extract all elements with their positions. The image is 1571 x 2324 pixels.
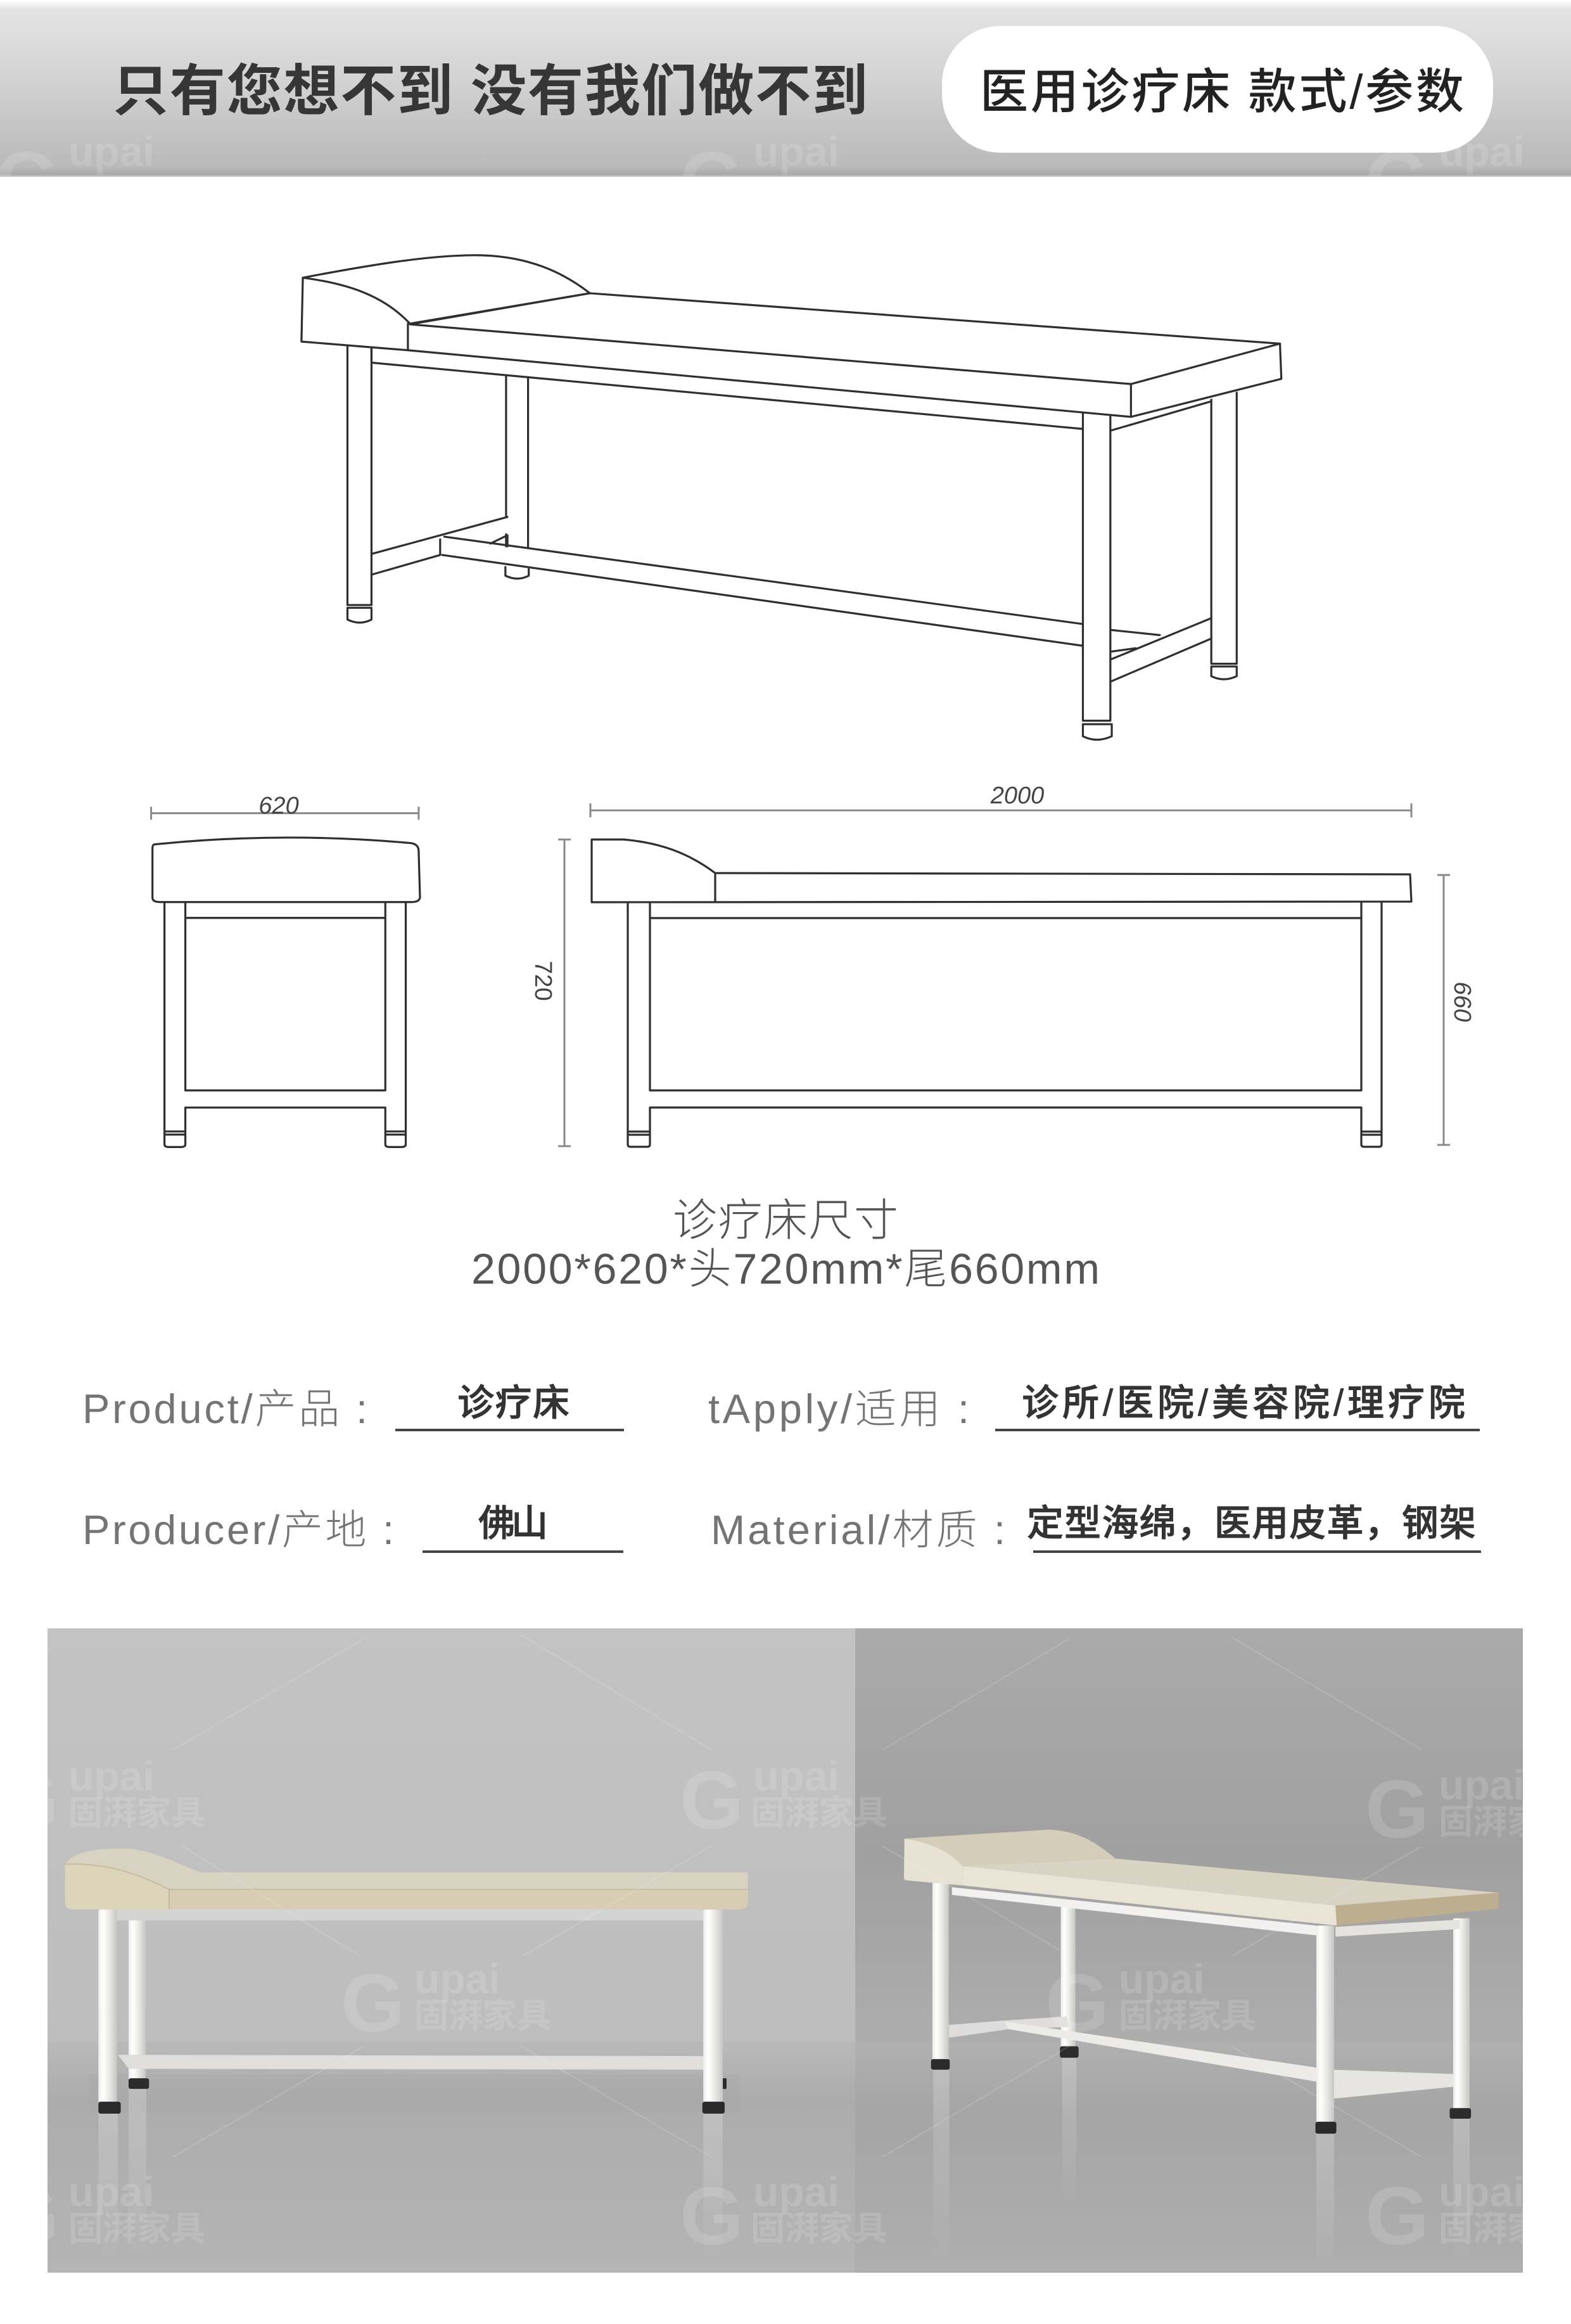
leg reflections bbox=[933, 2070, 950, 2262]
leg reflections bbox=[98, 2112, 118, 2262]
brand mark 3: 固湃家具 bbox=[414, 1997, 551, 2035]
label 660: 660 bbox=[1449, 981, 1475, 1022]
headrest bbox=[302, 255, 590, 350]
size caption: 2000*620*头720mm*尾660mm bbox=[471, 1245, 1100, 1293]
side legs and rails bbox=[628, 902, 1382, 1147]
side elevation drawing bbox=[558, 803, 1450, 1147]
brand mark 3 bbox=[345, 1963, 550, 2032]
spec: material: Material/材质 : bbox=[711, 1507, 1005, 1553]
label 2000: 2000 bbox=[990, 782, 1044, 809]
angled view bed bbox=[904, 1830, 1499, 2275]
back legs bbox=[1061, 1906, 1076, 2048]
brand mark 5 bbox=[1368, 1769, 1523, 1838]
mattress bbox=[65, 1849, 748, 1910]
brand mark 7: 固湃家具 bbox=[751, 2210, 887, 2248]
lower rail bbox=[118, 2055, 704, 2070]
brand mark 1: 固湃家具 bbox=[68, 1794, 205, 1832]
legs bbox=[348, 346, 371, 623]
header pill: 医用诊疗床 款式/参数 bbox=[980, 65, 1464, 119]
mattress and headrest bbox=[904, 1839, 964, 1886]
brand mark 6: 固湃家具 bbox=[68, 2210, 205, 2248]
brand mark 2: G bbox=[680, 1754, 744, 1846]
tail height dimension bbox=[1437, 875, 1450, 1145]
top rail bbox=[116, 1910, 704, 1920]
front legs bbox=[932, 1882, 949, 2060]
spec: producer: Producer/产地 : bbox=[82, 1507, 394, 1553]
spec: apply bbox=[708, 1382, 1480, 1432]
back leg bbox=[129, 1919, 146, 2079]
front cushion bbox=[153, 838, 420, 902]
header watermark: upai bbox=[68, 128, 155, 175]
front legs bbox=[98, 1910, 117, 2103]
spec: material bbox=[711, 1503, 1481, 1553]
brand mark 4: G bbox=[1045, 1957, 1109, 2049]
header watermark: G bbox=[1365, 134, 1429, 227]
size caption: 诊疗床尺寸 bbox=[673, 1196, 898, 1245]
brand mark 8 bbox=[1368, 2176, 1523, 2245]
spec: product bbox=[82, 1382, 624, 1432]
brand mark 4 bbox=[1049, 1963, 1254, 2032]
brand mark 3: G bbox=[341, 1957, 405, 2049]
label 620: 620 bbox=[258, 793, 299, 819]
perspective line drawing of bed bbox=[302, 255, 1282, 740]
head height dimension bbox=[558, 840, 571, 1146]
photo panel: angled view bbox=[855, 1628, 1523, 2275]
upper frame bbox=[952, 1887, 1316, 1936]
lower frame bbox=[949, 2017, 1069, 2038]
side profile mattress bbox=[592, 840, 1411, 902]
front elevation drawing bbox=[151, 807, 420, 1147]
frame rails bbox=[371, 349, 1211, 682]
brand mark 2: 固湃家具 bbox=[751, 1794, 887, 1832]
brand mark 2: upai bbox=[753, 1753, 839, 1799]
brand mark 6 bbox=[48, 2176, 204, 2244]
floor shadow bbox=[89, 2074, 739, 2112]
front view bed bbox=[65, 1849, 748, 2262]
photo watermarks bbox=[48, 1768, 1523, 2245]
mattress bbox=[408, 293, 1282, 417]
header pill bbox=[942, 26, 1493, 153]
brand mark 4: upai bbox=[1119, 1955, 1205, 2002]
brand mark 8: G bbox=[1365, 2169, 1429, 2262]
header band bbox=[0, 3, 1571, 177]
brand mark 1 bbox=[48, 1768, 204, 1828]
brand mark 7: upai bbox=[753, 2168, 839, 2215]
header watermark: upai bbox=[1439, 128, 1525, 175]
spec: product: Product/产品 : bbox=[82, 1386, 367, 1432]
label 720: 720 bbox=[530, 961, 556, 1001]
front width dimension bbox=[151, 807, 419, 820]
wall and floor bbox=[855, 1628, 1523, 2042]
header watermark: G bbox=[680, 134, 744, 227]
brand mark 5: upai bbox=[1439, 1761, 1525, 1808]
wall and floor bbox=[48, 1628, 855, 2041]
spec: apply: 诊所/医院/美容院/理疗院 bbox=[1022, 1382, 1465, 1424]
spec: producer bbox=[82, 1503, 623, 1553]
brand mark 1: upai bbox=[68, 1753, 155, 1799]
spec: apply: tApply/适用 : bbox=[708, 1386, 969, 1432]
brand mark 7: G bbox=[680, 2169, 744, 2262]
brand mark 8: upai bbox=[1439, 2168, 1525, 2215]
brand mark 5: G bbox=[1365, 1763, 1429, 1855]
brand mark 3: upai bbox=[414, 1955, 500, 2002]
spec: product: 诊疗床 bbox=[457, 1382, 569, 1424]
spec: material: 定型海绵，医用皮革，钢架 bbox=[1027, 1503, 1476, 1544]
brand mark 7 bbox=[683, 2176, 886, 2245]
brand mark 4: 固湃家具 bbox=[1119, 1997, 1256, 2035]
front legs and rails bbox=[165, 902, 406, 1147]
spec: producer: 佛山 bbox=[478, 1503, 548, 1544]
brand mark 2 bbox=[683, 1768, 886, 1829]
photo panel: front view bbox=[48, 1628, 855, 2273]
length dimension bbox=[590, 803, 1411, 817]
brand mark 6: upai bbox=[68, 2168, 155, 2215]
header watermark: upai bbox=[753, 128, 839, 175]
size caption bbox=[471, 1196, 1100, 1293]
header watermark bbox=[0, 143, 1522, 176]
header slogan: 只有您想不到 没有我们做不到 bbox=[113, 60, 868, 122]
